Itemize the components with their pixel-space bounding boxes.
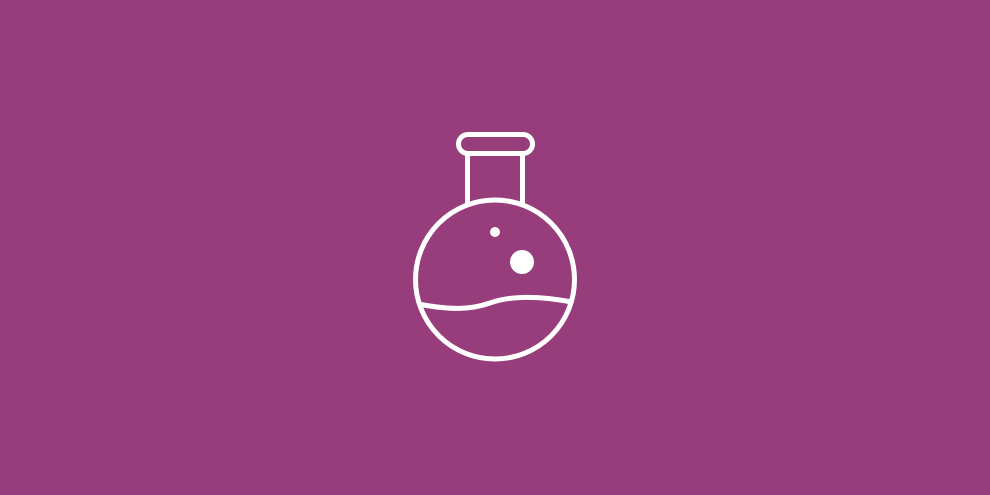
bubble large bbox=[510, 250, 534, 274]
flask cap bbox=[458, 134, 532, 154]
bubble small bbox=[490, 227, 500, 237]
flask neck bbox=[468, 154, 522, 205]
liquid line bbox=[418, 297, 572, 308]
flask body bbox=[416, 200, 574, 359]
